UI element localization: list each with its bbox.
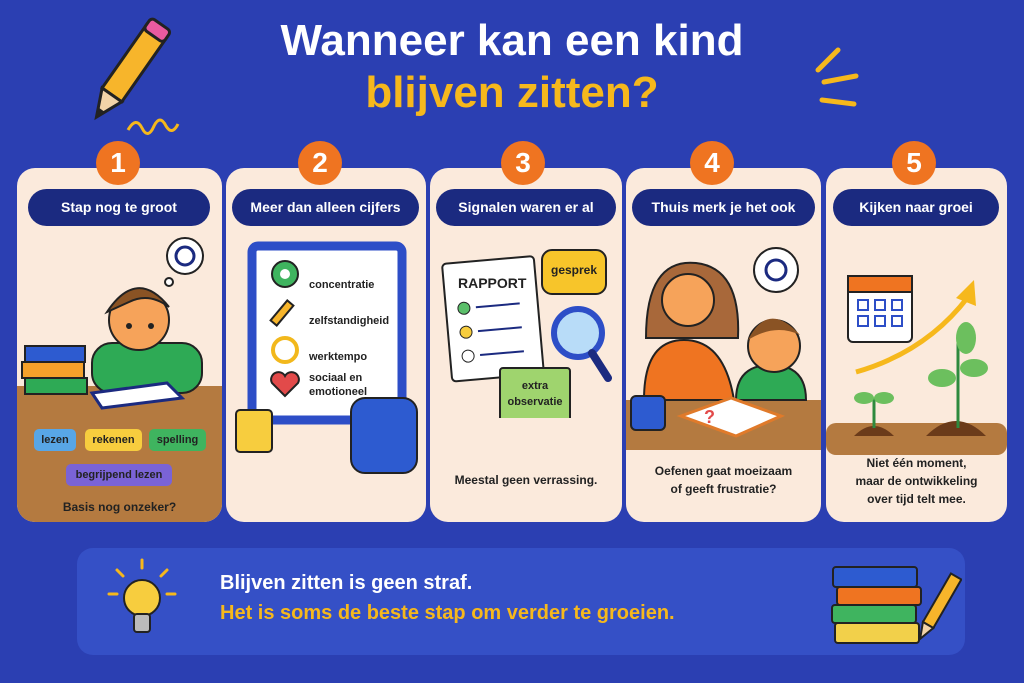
panel: card 5 (826, 168, 1007, 522)
panel: card 3: extra (522, 380, 548, 392)
panel: card 5: Niet één moment, (866, 456, 967, 470)
panel: card 3: Meestal geen verrassing. (455, 473, 597, 487)
text: Signalen waren er al (458, 199, 594, 215)
title: Wanneer kan een kind (281, 16, 743, 65)
headers: Stap nog te groot (61, 199, 177, 215)
headers (28, 189, 210, 226)
panel: card 4: ? (704, 407, 715, 427)
panel: card 3: gesprek (551, 263, 597, 277)
callout banner (77, 548, 965, 655)
icon: sparkle lines (816, 48, 858, 106)
panel: card 2 (226, 168, 426, 522)
panel: card 3 (430, 168, 622, 522)
panel: card 4 (626, 168, 821, 522)
text: 5 (906, 147, 922, 178)
tags: lezen (41, 434, 69, 446)
panel: card 2: zelfstandigheid (309, 315, 389, 327)
panel: card 1: spelling (157, 434, 198, 446)
number badges (96, 141, 140, 185)
text: 2 (312, 147, 328, 178)
icon: pencil top left (94, 18, 180, 135)
panel: card 2: sociaal en (309, 372, 362, 384)
icon: books and pencil (831, 566, 962, 644)
callout banner: Het is soms de beste stap om verder te groeien. (220, 602, 675, 624)
panel: card 1: rekenen (92, 434, 135, 446)
number badges: 1 (110, 147, 126, 178)
text: Thuis merk je het ook (652, 199, 795, 215)
panel: card 5: over tijd telt mee. (867, 492, 966, 506)
caption: Basis nog onzeker? (63, 500, 176, 514)
tags (34, 429, 76, 451)
panel: card 2: werktempo (309, 351, 367, 363)
panel: card 3: observatie (507, 396, 563, 408)
title (280, 16, 743, 117)
panel: card 3: RAPPORT (458, 275, 526, 291)
text: Meer dan alleen cijfers (250, 199, 401, 215)
icon: light bulb (108, 558, 176, 633)
panel: card 1 (17, 168, 222, 522)
text: 4 (704, 147, 720, 178)
panel: card 5: maar de ontwikkeling (855, 474, 978, 488)
text: 3 (515, 147, 531, 178)
panel: card 2: emotioneel (309, 386, 367, 398)
panel: card 4: of geeft frustratie? (670, 482, 776, 496)
text: Kijken naar groei (859, 199, 973, 215)
panel: card 1: begrijpend lezen (76, 469, 162, 481)
callout banner: Blijven zitten is geen straf. (220, 572, 472, 594)
panel: card 4: Oefenen gaat moeizaam (655, 464, 792, 478)
title: blijven zitten? (365, 68, 659, 117)
panel: card 2: concentratie (309, 279, 374, 291)
